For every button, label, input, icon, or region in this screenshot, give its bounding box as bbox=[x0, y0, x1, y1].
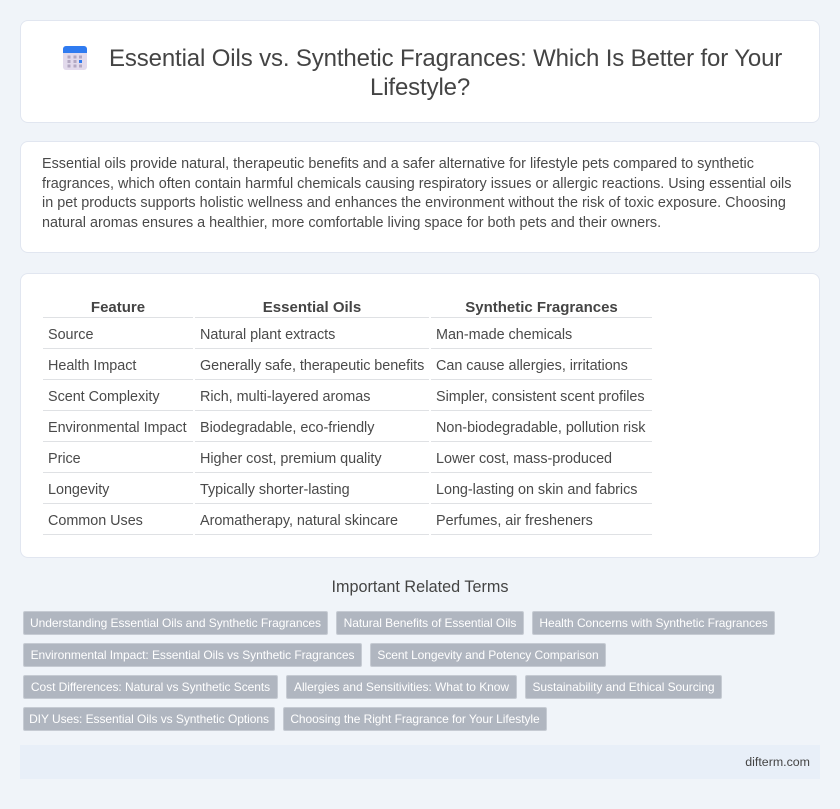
comparison table: Typically shorter-lasting bbox=[200, 482, 350, 498]
related terms tags: Allergies and Sensitivities: What to Know bbox=[294, 680, 509, 694]
title: Lifestyle? bbox=[370, 74, 470, 101]
comparison table: Rich, multi-layered aromas bbox=[200, 389, 370, 405]
comparison table: Scent Complexity bbox=[48, 389, 160, 405]
footer bar bbox=[20, 745, 820, 779]
intro paragraph: Essential oils provide natural, therapeutic benefits and a safer alternative for lifestyle pets compared to synthetic bbox=[42, 156, 754, 172]
comparison table: Natural plant extracts bbox=[200, 327, 335, 343]
comparison table: Common Uses bbox=[48, 513, 143, 529]
comparison table: Source bbox=[48, 327, 93, 343]
comparison table bbox=[43, 299, 652, 535]
comparison table: Aromatherapy, natural skincare bbox=[200, 513, 398, 529]
intro paragraph: in pet products supports holistic wellness and enhances the environment without the risk of toxic exposure. Choosing bbox=[42, 195, 786, 211]
comparison table: Health Impact bbox=[48, 358, 136, 374]
comparison table: Long-lasting on skin and fabrics bbox=[436, 482, 637, 498]
comparison table: Longevity bbox=[48, 482, 109, 498]
comparison table: Perfumes, air fresheners bbox=[436, 513, 593, 529]
related terms tags: Scent Longevity and Potency Comparison bbox=[377, 648, 599, 662]
related terms tags: Natural Benefits of Essential Oils bbox=[344, 616, 516, 630]
comparison table: Can cause allergies, irritations bbox=[436, 358, 628, 374]
intro paragraph bbox=[42, 156, 791, 230]
comparison table: Lower cost, mass-produced bbox=[436, 451, 612, 467]
comparison table: Environmental Impact bbox=[48, 420, 187, 436]
comparison table: Man-made chemicals bbox=[436, 327, 572, 343]
comparison table: Essential Oils bbox=[263, 299, 361, 316]
comparison table: Generally safe, therapeutic benefits bbox=[200, 358, 424, 374]
comparison table: Higher cost, premium quality bbox=[200, 451, 382, 467]
title bbox=[109, 45, 782, 101]
related terms tags: Understanding Essential Oils and Synthetic Fragrances bbox=[30, 616, 321, 630]
related terms tags: Choosing the Right Fragrance for Your Lifestyle bbox=[290, 712, 540, 726]
related terms tags: DIY Uses: Essential Oils vs Synthetic Options bbox=[29, 712, 269, 726]
footer brand: difterm.com bbox=[745, 755, 810, 769]
intro paragraph: natural aromas ensures a healthier, more comfortable living space for both pets and their owners. bbox=[42, 214, 661, 230]
comparison table: Biodegradable, eco-friendly bbox=[200, 420, 374, 436]
title: Essential Oils vs. Synthetic Fragrances: Which Is Better for Your bbox=[109, 45, 782, 72]
header panel bbox=[20, 20, 820, 123]
comparison table: Synthetic Fragrances bbox=[465, 299, 618, 316]
intro paragraph: fragrances, which often contain harmful chemicals causing respiratory issues or allergic reactions. Using essential oils bbox=[42, 176, 791, 192]
related terms tags: Cost Differences: Natural vs Synthetic Scents bbox=[31, 680, 270, 694]
icon: calendar bbox=[63, 46, 87, 70]
comparison table: Price bbox=[48, 451, 81, 467]
related terms tags: Environmental Impact: Essential Oils vs Synthetic Fragrances bbox=[31, 648, 354, 662]
comparison table: Feature bbox=[91, 299, 145, 316]
related terms heading: Important Related Terms bbox=[332, 578, 508, 596]
related terms tags: Sustainability and Ethical Sourcing bbox=[532, 680, 714, 694]
intro panel bbox=[20, 141, 820, 253]
related terms tags: Health Concerns with Synthetic Fragrances bbox=[539, 616, 768, 630]
comparison table: Non-biodegradable, pollution risk bbox=[436, 420, 645, 436]
comparison table panel bbox=[20, 273, 820, 558]
comparison table: Simpler, consistent scent profiles bbox=[436, 389, 645, 405]
related terms tags bbox=[23, 611, 775, 731]
